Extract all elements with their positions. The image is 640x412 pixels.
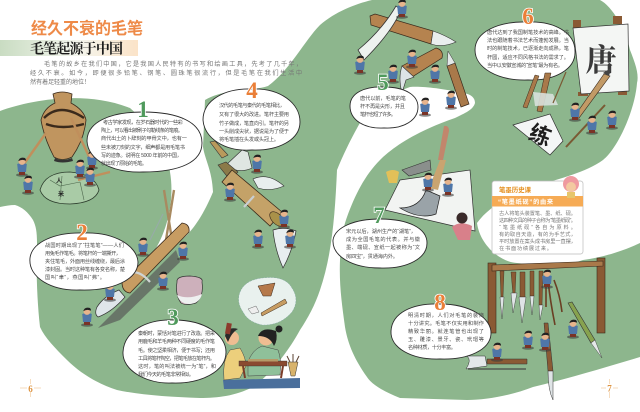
callout 8: 精致华丽。就连笔管也出现了 xyxy=(408,327,484,335)
page number 6: 6 xyxy=(28,384,33,394)
callout 5 xyxy=(350,70,418,128)
intro paragraph: 经久不衰。如今，即便很多铅笔、钢笔、圆珠笔很流行，但是毛笔在我们生活中 xyxy=(30,69,302,77)
intro paragraph: 毛笔的故乡在我们中国，它是我国人民特有的书写和绘画工具，先考了几千年， xyxy=(44,60,302,68)
callout 3: 工具将笔杆掏空，把笔毛放在笔杆内。 xyxy=(138,354,215,362)
history info card: 平时放置在案头成书房里一直摆， xyxy=(499,237,576,245)
illustration: calligraphy scroll with 唐 xyxy=(523,16,629,147)
history info card xyxy=(492,176,583,254)
callout 1: 写的迹象。说明在 5000 年前的中国， xyxy=(101,151,182,159)
callout 2 xyxy=(30,220,138,290)
callout 6: 唐代达到了我国制笔技术的高峰。书 xyxy=(487,28,569,36)
callout 7: 房四宝”，贯通海内外。 xyxy=(346,252,398,260)
callout 3: 我们今天的毛笔非常相似。 xyxy=(138,370,194,378)
callout 4: 又有了很大的改进。笔杆主要用 xyxy=(219,110,289,118)
illustration: calligraphy scroll with 唐: 唐 xyxy=(586,43,616,78)
people around vase xyxy=(16,151,98,195)
page number 7: 7 xyxy=(607,384,612,394)
callout 7: 7 xyxy=(373,203,385,228)
callout 6: 当中以安徽宣城的“宣笔”最为有名。 xyxy=(487,61,563,69)
callout 3: 用鹿毛和羊毛两种不同硬度的毛作笔 xyxy=(138,337,215,345)
history info card: 有的取自天造，有的为手艺式， xyxy=(499,230,576,238)
callout 1: 考古学家发现，在岁石器时代的一些彩 xyxy=(103,118,184,126)
callout 6: 法也跟随着书法艺术而蓬勃发展。当 xyxy=(487,36,569,44)
callout 8: 名种材质，十分丰富。 xyxy=(408,343,456,351)
callout 2: 国叫“聿”，燕国叫“弗”。 xyxy=(45,273,105,281)
illustration: ceramic jar xyxy=(176,276,202,304)
callout 2: 夹住笔毛，外面用丝线缠绕，最后涂 xyxy=(45,257,126,265)
callout 3: 这时，笔的叫法被统一为“笔”，和 xyxy=(138,362,216,370)
subtitle banner xyxy=(0,40,138,58)
callout 5: 5 xyxy=(377,70,389,95)
illustration: Han dynasty brush parts xyxy=(210,141,296,268)
callout 3: 3 xyxy=(167,305,179,330)
callout 4: 一头削成尖状，据说是为了便于 xyxy=(219,127,289,135)
intro paragraph xyxy=(30,60,302,86)
history info card: 这四种文具的种子合称为“笔墨纸砚”。 xyxy=(499,216,576,224)
callout 3: 秦朝时，蒙恬对笔进行了改造。把采 xyxy=(138,329,215,337)
callout 1: 商代出土的卜辞刻的甲骨文中，也有一 xyxy=(101,134,187,142)
callout 7 xyxy=(333,203,427,268)
callout 3 xyxy=(123,305,226,383)
callout 2: 2 xyxy=(76,220,88,245)
callout 8: 十分讲究。毛笔不仅实用和制作 xyxy=(408,319,484,327)
history info card: 笔墨历史课 xyxy=(499,185,532,194)
title: 经久不衰的毛笔 xyxy=(31,19,143,38)
callout 1: 就出现了原始的毛笔。 xyxy=(101,159,147,167)
callout 8 xyxy=(391,290,491,359)
callout 4: 4 xyxy=(246,78,258,103)
callout 6: 6 xyxy=(522,4,534,29)
illustration: ornate brushes on ground xyxy=(466,270,602,400)
callout 6: 杆圆，适应不同风格书法的需求了。 xyxy=(487,53,569,61)
callout 4: 汉代的毛笔与秦代的毛笔相比， xyxy=(219,101,285,109)
callout 4 xyxy=(203,78,300,150)
illustration: pottery vase and stone tablet xyxy=(21,92,110,204)
callout 5: 唐代以前，毛笔的笔 xyxy=(360,94,406,102)
illustration: paper with 练: 练 xyxy=(526,120,555,151)
subtitle banner: 毛笔起源于中国 xyxy=(30,40,123,58)
callout 2: 用兔毛作笔毛。将笔杆的一端撕开， xyxy=(45,249,121,257)
illustration: giant brush on paper xyxy=(385,126,475,240)
page number 7 xyxy=(601,379,618,398)
callout 7: 墨、端砚、宣纸一起被称为“文 xyxy=(346,243,421,251)
illustration: pottery vase and stone tablet: 米 xyxy=(58,190,64,198)
history info card: “笔墨纸砚”各自为原料。 xyxy=(499,223,576,231)
callout 6: 时的制笔技术，已逐渐走向成熟，笔 xyxy=(487,44,569,52)
callout 4: 将毛笔插在头发或头冠上。 xyxy=(219,135,279,143)
callout 2: 漆封固。当时这种笔有各变名称，楚 xyxy=(45,265,125,273)
illustration: two scholars at writing desk xyxy=(223,323,300,389)
callout 2: 战国时期出现了“拄笔笔”——人们 xyxy=(45,241,124,249)
callout 4: 竹子做成，笔直向引。笔杆的另 xyxy=(219,119,289,127)
history info card: 古人将笔头装置笔、墨、纸、砚。 xyxy=(499,209,576,217)
girl mascot xyxy=(563,176,579,198)
callout 1: 1 xyxy=(137,97,149,122)
callout 8: 8 xyxy=(434,290,446,315)
callout 8: 玉、雕漆、景牙、瓷、玳瑁等 xyxy=(408,335,484,343)
history info card: 在书面功绩展过来。 xyxy=(499,244,552,252)
callout 3: 毛。使之坚柔相济，便于书写；还用 xyxy=(138,346,215,354)
illustration: thought cloud xyxy=(239,277,296,325)
callout 7: 宋元以后，湖州生产的“湖笔”， xyxy=(346,227,416,235)
callout 5: 笔杆也短了许多。 xyxy=(360,110,396,118)
illustration: brush rack with hanging brushes xyxy=(488,258,605,333)
illustration: Tang era brushes at top xyxy=(354,0,469,117)
illustration: paper with 练 xyxy=(513,114,563,155)
page number 6 xyxy=(20,379,41,397)
callout 5: 杆不再是尖形，并且 xyxy=(360,102,405,110)
illustration: giant brush from callout 2 xyxy=(81,190,189,328)
illustration: pottery vase and stone tablet: 人 xyxy=(56,178,62,185)
history info card: “笔墨纸砚”的由来 xyxy=(498,198,554,206)
intro paragraph: 然有着足轻重的地位！ xyxy=(30,78,90,86)
callout 1 xyxy=(87,97,202,172)
callout 8: 明清时期，人们对毛笔的装饰 xyxy=(408,311,484,319)
callout 1: 陶上，可以看出被刷子勾勒线条的笔痕。 xyxy=(101,126,183,134)
callout 7: 成为全国毛笔的代表。并与徽 xyxy=(346,235,421,243)
callout 6 xyxy=(475,4,575,80)
callout 1: 些未被刀刻的文字，细声都是用毛笔书 xyxy=(101,143,185,151)
